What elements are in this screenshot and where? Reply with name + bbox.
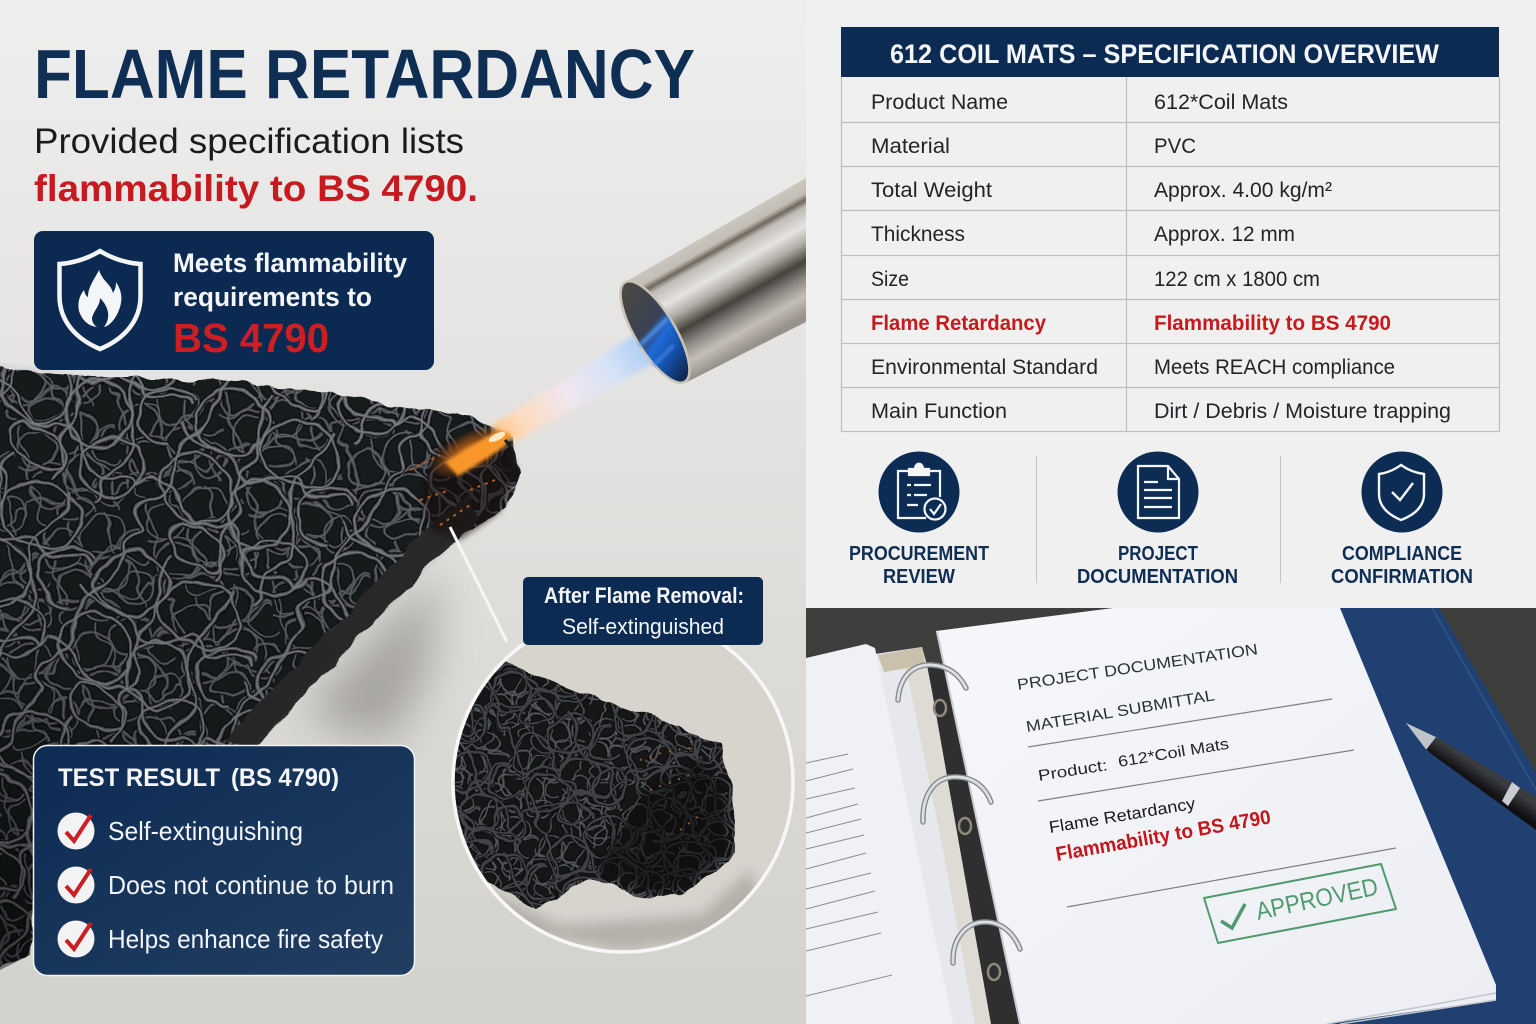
callout: after flame removal: After Flame Removal: [544, 583, 744, 608]
row: main function [871, 400, 1451, 423]
row: product name: Product Name [871, 91, 1008, 114]
document rules [1028, 699, 1396, 907]
badge text: Meets flammability [173, 248, 407, 278]
icon: clipboard check [878, 452, 960, 532]
test result heading [58, 764, 339, 792]
table grid [841, 77, 1500, 432]
result: does not continue to burn [58, 866, 394, 904]
burnt mat edge [420, 428, 517, 540]
use case: project documentation [1077, 452, 1238, 588]
test result heading: TEST RESULT [58, 764, 220, 792]
label: compliance confirmation: COMPLIANCE [1342, 543, 1462, 565]
table header: 612 COIL MATS – SPECIFICATION OVERVIEW [890, 39, 1439, 69]
label: procurement review: REVIEW [883, 566, 955, 588]
result: helps enhance fire safety: Helps enhance fire safety [108, 924, 383, 954]
result: self-extinguishing: Self-extinguishing [108, 816, 303, 846]
mat side band [226, 495, 480, 750]
row: thickness: Thickness [871, 223, 965, 246]
row: product name: 612*Coil Mats [1154, 91, 1288, 114]
badge: meets BS 4790 [34, 231, 434, 370]
row: thickness: Approx. 12 mm [1154, 223, 1295, 246]
result: self-extinguishing [58, 812, 303, 850]
table header [841, 27, 1499, 77]
row: material: PVC [1154, 135, 1196, 158]
row: size: 122 cm x 1800 cm [1154, 268, 1320, 291]
row: environmental standard [871, 356, 1395, 379]
result: does not continue to burn: Does not continue to burn [108, 870, 394, 900]
row: material: Material [871, 135, 950, 158]
specification table [841, 27, 1500, 432]
label: compliance confirmation [1331, 543, 1473, 588]
callout: after flame removal: Self-extinguished [562, 614, 724, 639]
icon: shield check [1362, 452, 1442, 532]
callout: after flame removal [523, 577, 763, 645]
photo: project documentation binder [806, 608, 1536, 1024]
torch flame [431, 334, 653, 478]
test result heading: (BS 4790) [231, 764, 339, 792]
row: flame retardancy [871, 312, 1391, 335]
panel: test result [34, 746, 414, 976]
result: helps enhance fire safety [58, 920, 383, 958]
panel: right top background [806, 0, 1536, 608]
row: product name [871, 91, 1288, 114]
left page stack [806, 644, 953, 1024]
document flame value: Flammability to BS 4790 [1054, 806, 1273, 866]
title: FLAME RETARDANCY [34, 35, 695, 113]
row: total weight [871, 179, 1332, 202]
row: material [871, 135, 1196, 158]
row: main function: Main Function [871, 400, 1007, 423]
row: total weight: Approx. 4.00 kg/m² [1154, 179, 1332, 202]
label: procurement review: PROCUREMENT [849, 543, 989, 565]
row: environmental standard: Meets REACH compliance [1154, 356, 1395, 379]
document product value: 612*Coil Mats [1117, 736, 1230, 771]
label: project documentation: DOCUMENTATION [1077, 566, 1238, 588]
badge text: BS 4790 [173, 315, 329, 361]
icon: document [1118, 452, 1198, 532]
document subheading: MATERIAL SUBMITTAL [1025, 687, 1216, 736]
approved stamp: APPROVED [1253, 873, 1381, 926]
mat shading [0, 472, 406, 970]
icon: shield with flame [60, 251, 140, 349]
document heading: PROJECT DOCUMENTATION [1016, 641, 1259, 694]
label: procurement review [849, 543, 989, 588]
subtitle line 2: flammability to BS 4790. [34, 168, 478, 209]
label: project documentation [1077, 543, 1238, 588]
badge text [173, 248, 407, 361]
magnified view: extinguished mat [440, 527, 794, 953]
badge text: requirements to [173, 282, 372, 312]
row: total weight: Total Weight [871, 179, 992, 202]
torch nozzle [608, 178, 806, 392]
row: main function: Dirt / Debris / Moisture trapping [1154, 400, 1451, 423]
document product label: Product: [1037, 757, 1109, 785]
main document page [936, 608, 1496, 1024]
row: size [871, 268, 1320, 291]
label: compliance confirmation: CONFIRMATION [1331, 566, 1473, 588]
row: thickness [871, 223, 1295, 246]
blue folder [1320, 608, 1536, 1024]
row: environmental standard: Environmental Standard [871, 356, 1098, 379]
row: flame retardancy: Flammability to BS 4790 [1154, 312, 1391, 335]
left page lines [806, 754, 892, 996]
binder inner strip [876, 647, 975, 1024]
document flame label: Flame Retardancy [1048, 795, 1197, 837]
subtitle line 1: Provided specification lists [34, 122, 464, 161]
binder rings [898, 665, 1020, 963]
use case: compliance confirmation [1331, 452, 1473, 588]
row: flame retardancy: Flame Retardancy [871, 312, 1046, 335]
use case: procurement review [849, 452, 989, 588]
panel: left hero background [0, 0, 806, 1024]
spine rivets [934, 700, 1000, 980]
approved stamp [1204, 864, 1396, 943]
binder tab and rail [905, 647, 991, 1024]
label: project documentation: PROJECT [1118, 543, 1198, 565]
photo: coil mat under flame [0, 178, 806, 975]
row: size: Size [871, 268, 909, 291]
binder spine [927, 663, 1020, 1024]
coil mat body [0, 360, 520, 975]
pen [1406, 723, 1536, 830]
